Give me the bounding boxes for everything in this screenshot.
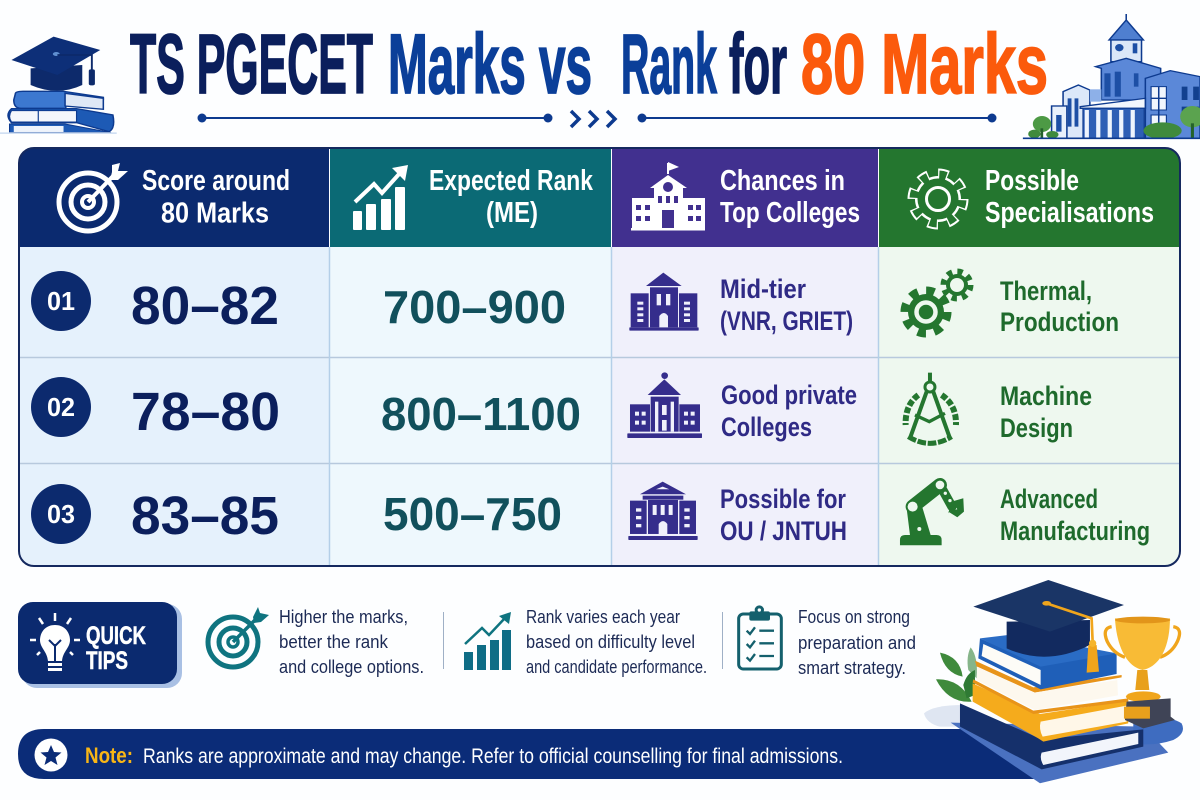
tip: focus: smart strategy. [798, 657, 906, 678]
row 1: Thermal, [1000, 276, 1092, 306]
table row backgrounds [19, 247, 1180, 566]
title: Marks vs [388, 17, 592, 111]
header cell: expected rank: Expected Rank [429, 165, 594, 197]
row number 02: 02 [47, 392, 75, 422]
row 2: Colleges [721, 412, 812, 442]
tip: higher marks: Higher the marks, [279, 606, 408, 627]
illustration: books, cap and trophy [924, 580, 1183, 783]
row number 02 [31, 377, 91, 437]
tip: focus: Focus on strong [798, 606, 910, 627]
leaves [936, 647, 977, 702]
row 3 [31, 481, 1150, 546]
row 2: Good private [721, 380, 857, 410]
tip: rank varies [444, 607, 707, 677]
note bar: Note: [85, 743, 133, 768]
quick tips badge [18, 602, 182, 688]
row 1: 80–82 [131, 276, 279, 336]
row 3: 500–750 [383, 488, 562, 540]
cap on books [973, 580, 1124, 673]
tip: focus: preparation and [798, 632, 916, 653]
header cell: possible specialisations: Possible [985, 165, 1079, 197]
header cell: score: 80 Marks [161, 198, 269, 230]
row 3: 83–85 [131, 486, 279, 546]
row number 03 [31, 484, 91, 544]
header cell: score: Score around [142, 165, 290, 197]
header cell: expected rank [330, 148, 611, 247]
icon: light bulb [30, 613, 80, 671]
tip: rank varies: Rank varies each year [526, 607, 680, 627]
header cell: possible specialisations [879, 148, 1180, 247]
header cell: score [19, 148, 329, 247]
title underline with chevrons [198, 111, 996, 127]
row 2: Machine [1000, 381, 1092, 411]
bottom navy book [960, 703, 1143, 769]
row 2 [31, 372, 1092, 443]
yellow book [973, 683, 1128, 742]
cream book [973, 661, 1128, 714]
tip: rank varies: and candidate performance. [526, 657, 707, 677]
row 3: Manufacturing [1000, 516, 1150, 546]
title: 80 Marks [801, 17, 1048, 111]
icon: rising bar chart [353, 165, 408, 230]
icon: robot arm [900, 481, 964, 545]
header cell: chances in top colleges: Chances in [720, 165, 845, 197]
row number 01: 01 [47, 286, 75, 316]
trophy [1105, 617, 1180, 728]
icon: graduation cap on books [0, 37, 117, 134]
tip: higher marks: and college options. [279, 656, 424, 677]
tip: focus [722, 605, 916, 678]
title: for [729, 17, 787, 111]
row 1: Mid-tier [720, 274, 806, 304]
icon: college building illustration [1023, 14, 1200, 139]
icon: teal target [208, 607, 269, 667]
icon: star badge [34, 738, 68, 772]
row 2: 78–80 [131, 382, 280, 442]
row 3: OU / JNTUH [720, 516, 847, 546]
tip: higher marks: better the rank [279, 631, 389, 652]
quick tips badge: QUICK [86, 622, 146, 650]
title: Rank [621, 17, 717, 111]
row 3: Possible for [720, 484, 846, 514]
icon: college [631, 162, 705, 230]
icon: college 3 [628, 482, 698, 540]
tip: rank varies: based on difficulty level [526, 632, 695, 652]
header cell: chances in top colleges [612, 148, 878, 247]
row number 03: 03 [47, 499, 75, 529]
row 1 [31, 271, 1119, 337]
icon: gears [907, 273, 969, 331]
header cell: chances in top colleges: Top Colleges [720, 197, 860, 229]
blue book [978, 634, 1117, 689]
row 1: Production [1000, 307, 1119, 337]
icon: clipboard checklist [739, 605, 781, 669]
header cell: possible specialisations: Specialisations [985, 197, 1154, 229]
row number 01 [31, 271, 91, 331]
tip: higher marks [208, 606, 424, 677]
title [130, 17, 1048, 111]
quick tips badge: TIPS [86, 647, 128, 675]
row 1: (VNR, GRIET) [720, 306, 853, 336]
icon: compass with gear [906, 373, 956, 443]
note bar: Ranks are approximate and may change. Refer to official counselling for final admissions. [143, 745, 843, 768]
icon: target [59, 163, 128, 231]
row 2: Design [1000, 413, 1073, 443]
row 2: 800–1100 [381, 388, 581, 440]
icon: outline gear [914, 175, 962, 223]
row 1: 700–900 [383, 281, 566, 333]
table outer border [19, 148, 1180, 566]
icon: teal bar chart [464, 612, 511, 670]
row 3: Advanced [1000, 484, 1098, 514]
icon: college 2 [627, 372, 702, 438]
header cell: expected rank: (ME) [486, 197, 538, 229]
note bar [18, 729, 1040, 779]
icon: college 1 [629, 273, 699, 331]
title: TS PGECET [130, 17, 373, 111]
comparison table [19, 148, 1180, 566]
